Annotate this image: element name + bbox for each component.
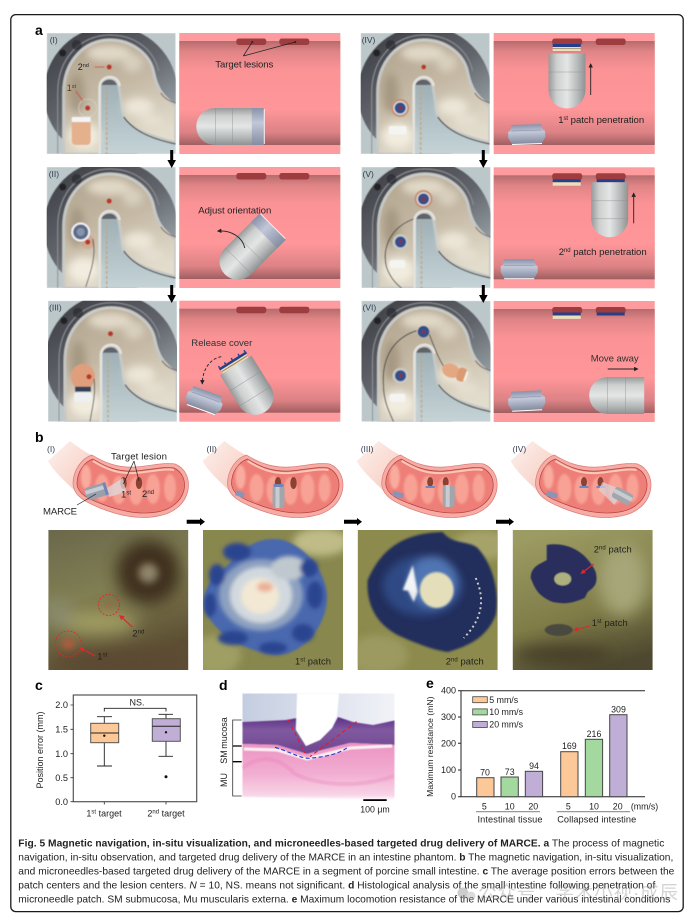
x labels: 5 — [482, 802, 487, 812]
y ticks: 2.0 — [55, 700, 68, 710]
microscope photo IV: both patches: patch — [606, 544, 632, 554]
x labels: 1 — [86, 808, 91, 818]
y tick labels: 400 — [441, 686, 456, 696]
microscope photo II: 1st patch: 1 — [295, 656, 300, 666]
photo a-I: 2 — [78, 62, 83, 72]
bar values: 169 — [562, 741, 577, 751]
bar values: 73 — [505, 767, 515, 777]
x labels: 10 — [505, 802, 515, 812]
x labels: 5 — [566, 802, 571, 812]
microscope photo IV: both patches: 1 — [592, 617, 597, 628]
intestine illustration II — [202, 441, 343, 518]
diagram a-V — [494, 167, 655, 288]
significance bracket — [104, 697, 166, 712]
panel a — [35, 22, 655, 428]
caption: Fig. 5 Magnetic navigation, in-situ visualization, and microneedles-based targeted drug delivery of MARCE. a The process of magnetic — [18, 839, 664, 850]
photo a-I: nd — [83, 63, 89, 69]
photo a-I: (I) — [50, 35, 58, 45]
diagram a-I — [179, 33, 340, 154]
diagram a-III: Release cover — [191, 338, 253, 349]
label c: c — [35, 677, 43, 693]
intestine illustration I: MARCE — [43, 506, 77, 518]
microscope photo III: 2nd patch: nd — [451, 658, 458, 664]
y tick labels: 0 — [451, 792, 456, 802]
label a: a — [35, 22, 43, 38]
histology image — [242, 694, 394, 800]
y ticks: 0.5 — [55, 773, 68, 783]
diagram a-II — [179, 167, 340, 288]
tissue layer brackets: MU — [219, 773, 229, 787]
diagram a-II: Adjust orientation — [198, 206, 271, 216]
microscope photo III: 2nd patch: patch — [458, 656, 484, 666]
photo a-VI: (VI) — [362, 303, 376, 313]
caption: navigation, in-situ observation, and targeted drug delivery of the MARCE in an intestine phantom. b The magnetic navigation, in-situ visualization, — [18, 853, 673, 864]
microscope photo IV: both patches: nd — [599, 546, 606, 552]
y tick labels: 100 — [441, 765, 456, 775]
scale bar: 100 μm — [360, 804, 390, 814]
photo a-I: st — [72, 84, 76, 90]
y tick labels — [441, 686, 456, 802]
y ticks — [55, 700, 166, 807]
arrow: step IV to V — [479, 150, 488, 168]
y axis title: Maximum resistance (mN) — [425, 696, 435, 797]
y tick labels: 200 — [441, 738, 456, 748]
bar values: 309 — [611, 704, 626, 714]
microscope photo IV: both patches — [513, 530, 653, 670]
box: 1st target — [91, 717, 119, 766]
intestine illustration I: (I) — [47, 444, 55, 454]
label d: d — [219, 677, 228, 693]
y ticks: 1.0 — [55, 749, 68, 759]
y ticks: 1.5 — [55, 724, 68, 734]
x labels: (mm/s) — [631, 802, 658, 812]
intestine illustration I: Target lesion — [111, 452, 167, 462]
watermark: 公众号：学术小视·成辰 — [478, 882, 678, 903]
microscope photo I: lesions: 2 — [132, 628, 138, 640]
intestine illustration I: st — [126, 490, 131, 496]
x labels: target — [96, 808, 122, 818]
legend: 10 mm/s — [489, 707, 524, 717]
microscope photo II: 1st patch: patch — [305, 656, 331, 666]
group labels: Intestinal tissue — [478, 814, 542, 824]
intestine illustration IV — [510, 441, 651, 518]
x labels: nd — [152, 810, 159, 816]
x labels: 20 — [613, 802, 623, 812]
intestine illustration I: nd — [147, 490, 154, 496]
caption: patch centers and the lesion centers. N = 10, NS. means not significant. d Histological analysis of the small intestine following penetration of — [18, 881, 655, 892]
photo a-IV: (IV) — [362, 35, 376, 45]
photo a-V — [362, 167, 490, 288]
diagram a-IV: 1 — [558, 115, 564, 126]
microscope photo I: lesions: st — [103, 652, 108, 658]
scale bar — [360, 799, 390, 814]
microscope photo IV: both patches: patch — [602, 617, 628, 628]
arrow: step I to II — [167, 150, 176, 168]
intestine illustration III: (III) — [361, 444, 374, 454]
bar values: 70 — [480, 768, 490, 778]
bar values: 216 — [587, 729, 601, 739]
diagram a-I: Target lesions — [215, 60, 274, 70]
intestine illustration III — [357, 441, 497, 518]
legend: 20 mm/s — [489, 720, 524, 730]
bar values — [480, 704, 626, 778]
photo a-IV — [360, 33, 490, 154]
photo a-I: 1 — [67, 83, 72, 93]
diagram a-V: 2 — [559, 247, 564, 258]
microscope photo III: 2nd patch: 2 — [446, 656, 451, 666]
intestine illustration I — [43, 441, 188, 518]
x labels: 2 — [147, 808, 152, 818]
photo a-VI — [362, 300, 490, 422]
bars — [477, 715, 627, 797]
panel e: bar chart — [425, 675, 658, 824]
bar values: 94 — [529, 761, 539, 771]
panel c: box plot — [35, 677, 197, 818]
diagram a-V: patch penetration — [571, 247, 647, 258]
group labels: Collapsed intestine — [557, 814, 636, 824]
legend: 5 mm/s — [489, 695, 519, 705]
microscope photo I: lesions: nd — [138, 630, 144, 636]
tissue layer brackets: mucosa — [219, 717, 229, 749]
microscope photo I: lesions — [44, 530, 188, 674]
x labels: 10 — [589, 802, 599, 812]
microscope photo IV: both patches: st — [597, 619, 602, 625]
intestine illustration II: (II) — [206, 444, 217, 454]
microscope photo I: lesions: 1 — [97, 652, 103, 662]
arrow: b II to III — [344, 518, 362, 526]
microscope photo IV: both patches: 2 — [594, 544, 599, 554]
intestine illustration I: 1 — [121, 490, 126, 500]
arrow: b III to IV — [496, 518, 514, 526]
y tick labels: 300 — [441, 712, 456, 722]
plot frame — [73, 695, 197, 802]
label b: b — [35, 429, 44, 445]
photo a-II: (II) — [49, 169, 59, 179]
diagram a-IV — [494, 33, 655, 154]
group labels — [478, 814, 636, 824]
diagram a-IV: st — [563, 116, 568, 122]
axes — [458, 691, 645, 797]
x labels: target — [159, 808, 185, 818]
caption — [18, 839, 675, 906]
y ticks: 0.0 — [55, 797, 68, 807]
significance bracket: NS. — [129, 697, 145, 707]
photo a-II — [46, 167, 176, 288]
tissue layer brackets — [219, 717, 242, 796]
photo a-III: (III) — [49, 303, 62, 313]
tissue layer brackets: SM — [219, 750, 229, 764]
intestine illustration I: 2 — [142, 489, 147, 500]
microscope photo II: 1st patch: st — [300, 658, 305, 664]
x labels: st — [91, 810, 96, 816]
y axis title: Position error (mm) — [35, 711, 45, 789]
diagram a-VI — [494, 301, 655, 422]
microscope photo II: 1st patch — [203, 530, 343, 670]
arrow: step V to VI — [479, 285, 488, 303]
x labels — [476, 802, 658, 812]
label e: e — [426, 675, 434, 691]
panel b — [35, 429, 653, 675]
microscope photo III: 2nd patch — [358, 530, 498, 670]
photo a-I — [46, 33, 176, 154]
diagram a-VI: Move away — [591, 354, 639, 364]
diagram a-V: nd — [564, 248, 571, 254]
x labels — [86, 808, 185, 818]
caption: and microneedles-based targeted drug delivery of the MARCE in a segment of porcine small intestine. c The average position errors between the — [18, 867, 675, 878]
panel d: histology — [219, 677, 394, 814]
arrow: step II to III — [167, 285, 176, 303]
photo a-III — [48, 300, 177, 422]
legend — [473, 695, 524, 730]
intestine illustration IV: (IV) — [512, 444, 526, 454]
photo a-V: (V) — [362, 169, 374, 179]
arrow: b I to II — [187, 518, 205, 526]
x labels: 20 — [528, 802, 538, 812]
diagram a-IV: patch penetration — [568, 115, 644, 126]
diagram a-III — [179, 301, 340, 422]
box: 2nd target — [152, 714, 180, 778]
caption: microneedle patch. SM submucosa, Mu muscularis externa. e Maximum locomotion resistance of the MARCE under various intestinal conditions — [18, 895, 670, 906]
